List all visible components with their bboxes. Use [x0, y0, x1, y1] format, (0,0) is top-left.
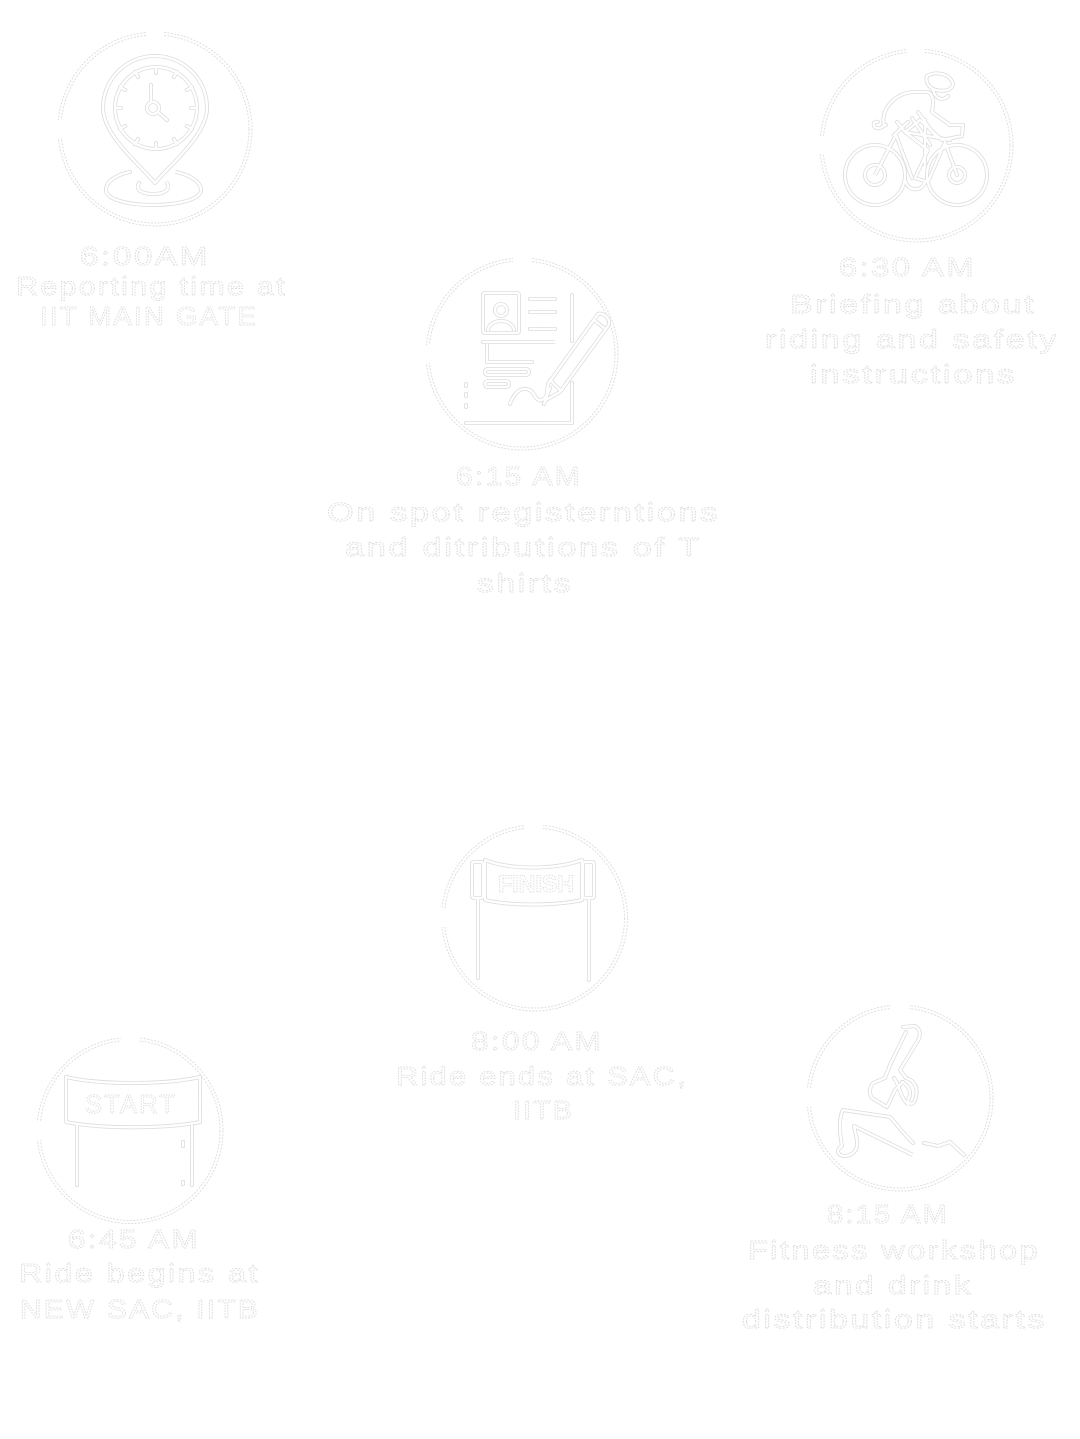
ring: clock badge: [55, 28, 252, 226]
description: IIT MAIN GATE: [40, 301, 258, 331]
description: Reporting time at: [16, 271, 287, 301]
icon: location pin with clock: [103, 56, 207, 205]
description: [327, 497, 720, 598]
description: Ride begins at: [19, 1258, 260, 1288]
description: On spot registerntions: [327, 497, 720, 527]
time label: 6:00AM: [80, 241, 210, 271]
description: [396, 1061, 688, 1125]
icon: signed form and pencil: [466, 293, 609, 423]
panel: 8:00 AM ride ends: [396, 821, 688, 1125]
ring: start badge: [33, 1033, 223, 1224]
description: [19, 1258, 260, 1324]
description: riding and safety: [765, 324, 1059, 354]
description: [16, 271, 287, 331]
description: [742, 1235, 1047, 1334]
time label: 6:15 AM: [456, 461, 582, 491]
description: [765, 289, 1059, 389]
description: and ditributions of T: [345, 532, 702, 562]
icon: start banner: START: [85, 1089, 177, 1119]
icon: finish banner: [472, 860, 594, 980]
description: instructions: [810, 359, 1017, 389]
description: Fitness workshop: [748, 1235, 1040, 1265]
time label: 6:30 AM: [839, 252, 976, 282]
ring: form badge: [422, 254, 618, 450]
description: NEW SAC, IITB: [20, 1294, 260, 1324]
description: and drink: [813, 1270, 973, 1300]
panel: 6:45 AM ride begins: [19, 1033, 260, 1324]
panel: 6:15 AM registrations: [327, 254, 720, 598]
ring: finish badge: [438, 821, 628, 1011]
description: shirts: [477, 568, 573, 598]
panel: 6:30 AM briefing: [765, 45, 1059, 389]
icon: start banner: [66, 1077, 200, 1185]
ring: cyclist badge: [816, 45, 1013, 242]
ring: yoga badge: [803, 1001, 993, 1191]
description: Briefing about: [790, 289, 1036, 319]
icon: cyclist: [845, 73, 987, 205]
time label: 6:45 AM: [68, 1224, 200, 1254]
description: distribution starts: [742, 1304, 1047, 1334]
panel: 6:00 AM reporting time: [16, 28, 287, 331]
time label: 8:00 AM: [471, 1026, 603, 1056]
description: Ride ends at SAC,: [396, 1061, 688, 1091]
icon: finish banner: FINISH: [498, 871, 574, 898]
icon: stretching figure: [838, 1026, 964, 1156]
description: IITB: [513, 1095, 574, 1125]
time label: 8:15 AM: [827, 1199, 949, 1229]
panel: 8:15 AM fitness workshop: [742, 1001, 1047, 1334]
